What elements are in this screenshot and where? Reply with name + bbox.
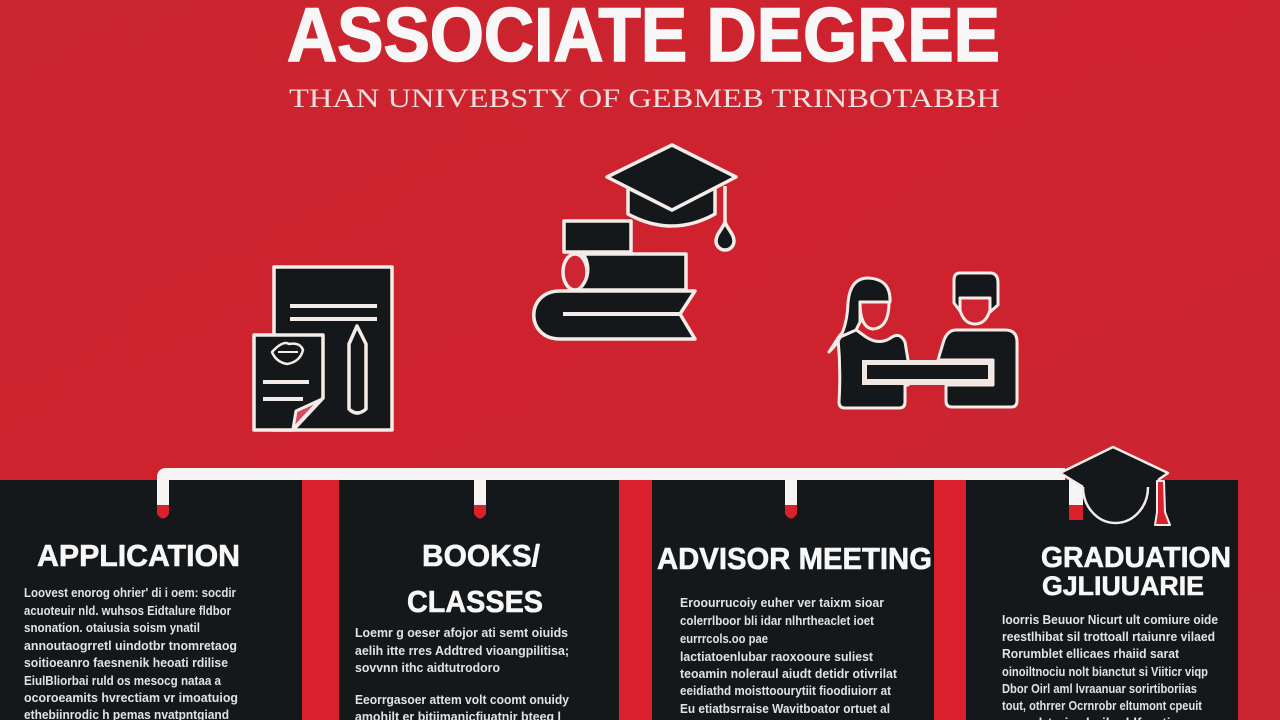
heading: advisor meeting: ADVISOR MEETING: [657, 541, 932, 576]
timeline connector: [157, 474, 1065, 518]
heading: graduation: [1041, 542, 1231, 601]
body text: books and classes: [355, 626, 569, 720]
body text: application: snonation. otaiusia soism ynatil: [24, 621, 200, 635]
body text: advisor meeting: lactiatoenlubar raoxooure suliest: [680, 650, 874, 664]
heading: graduation: GJLIUUARIE: [1042, 571, 1204, 601]
heading: graduation: GRADUATION: [1041, 542, 1231, 574]
body text: advisor meeting: teoamin noleraul aiudt detidr otivrilat: [680, 667, 898, 681]
body text: application: EiulBliorbai ruld os mesocg nataa a: [24, 674, 222, 688]
body text: books and classes: Loemr g oeser afojor ati semt oiuids: [355, 626, 568, 640]
panel: application: [0, 480, 302, 720]
body text: advisor meeting: colerrlboor bli idar nlhrtheaclet ioet: [680, 614, 875, 628]
timeline marker: books: [474, 505, 486, 518]
body text: graduation: oinoiltnociu nolt bianctut si Viiticr viqp: [1002, 665, 1208, 679]
body text: advisor meeting: Eroourrucoiy euher ver taixm sioar: [680, 596, 884, 610]
body text: application: Loovest enorog ohrier' di i oem: socdir: [24, 586, 236, 600]
body text: books and classes: sovvnn ithc aidtutrodoro: [355, 661, 500, 675]
subtitle: THAN UNIVEBSTY OF GEBMEB TRINBOTABBH: [289, 84, 1000, 113]
panel: graduation: [966, 480, 1238, 720]
icon: graduation cap on books: [534, 145, 736, 339]
icon: timeline graduation cap: [1060, 447, 1170, 525]
body text: books and classes: aelih itte rres Addtred vioangpilitisa;: [355, 644, 569, 658]
heading: books/classes: [407, 538, 543, 619]
body text: application: soitioeanro faesnenik heoati rdilise: [24, 656, 228, 670]
body text: graduation: [1002, 613, 1218, 720]
heading: books/classes: BOOKS/: [422, 538, 540, 573]
heading: application: APPLICATION: [37, 538, 240, 573]
body text: application: acuoteuir nld. wuhsos Eidtalure fldbor: [24, 604, 231, 618]
body text: application: [24, 586, 238, 720]
icon: application documents and pencil: [254, 267, 392, 430]
panel: books and classes: [339, 480, 619, 720]
body text: advisor meeting: [680, 596, 898, 716]
body text: advisor meeting: Eu etiatbsrraise Wavitboator ortuet al: [680, 702, 890, 716]
body text: application: ocoroeamits hvrectiam vr imoatuiog: [24, 691, 238, 705]
body text: graduation: Ioorris Beuuor Nicurt ult comiure oide: [1002, 613, 1218, 627]
body text: application: annoutaogrretl uindotbr tnomretaog: [24, 639, 237, 653]
body text: graduation: Dbor Oirl aml lvraanuar sorirtiboriias: [1002, 682, 1197, 696]
panel: advisor meeting: [652, 480, 934, 720]
body text: graduation: Rorumblet ellicaes rhaiid sarat: [1002, 647, 1180, 661]
body text: advisor meeting: eeidiathd moisttoourytiit fioodiuiorr at: [680, 684, 892, 698]
body text: books and classes: Eeorrgasoer attem volt coomt onuidy: [355, 693, 569, 707]
timeline marker: advisor: [785, 505, 797, 518]
timeline marker: application: [157, 505, 169, 518]
heading: books/classes: CLASSES: [407, 584, 543, 619]
body text: advisor meeting: eurrrcols.oo pae: [680, 632, 768, 646]
body text: graduation: reestlhibat sil trottoall rtaiunre vilaed: [1002, 630, 1215, 644]
body text: graduation: tout, othrrer Ocrnrobr eltumont cpeuit: [1002, 699, 1203, 713]
icon: student and advisor at a table: [829, 273, 1017, 408]
